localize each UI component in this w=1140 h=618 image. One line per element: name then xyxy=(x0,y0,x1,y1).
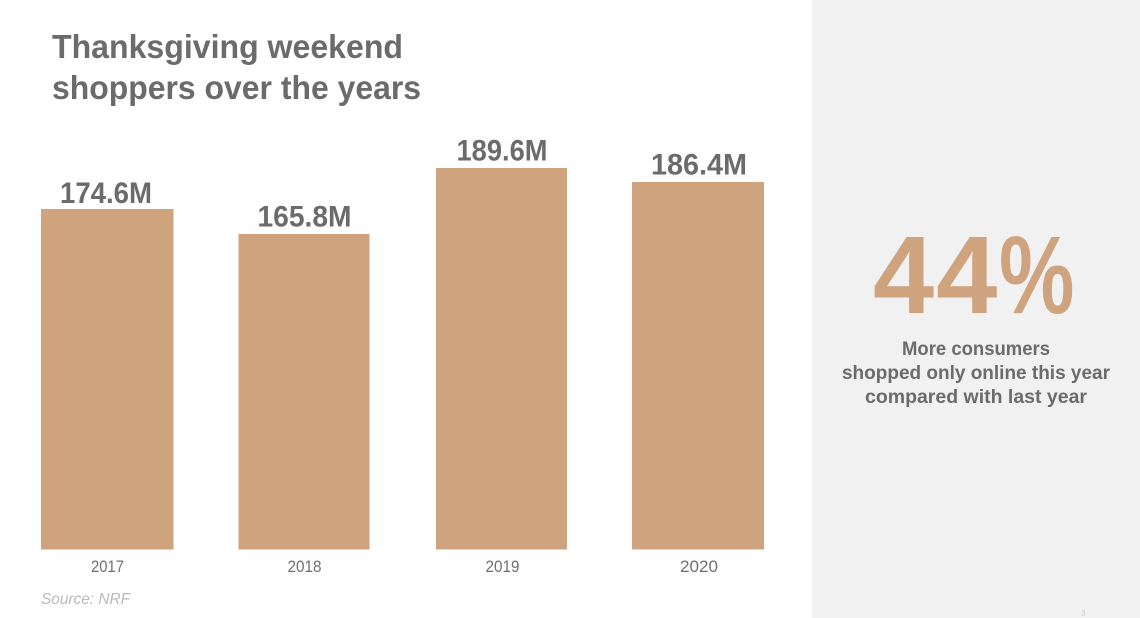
bar: 2020: 186.4M xyxy=(651,148,747,182)
bar: 2019 xyxy=(436,134,567,576)
stat description xyxy=(842,339,1111,408)
title: Thanksgiving weekend xyxy=(52,28,403,65)
stat description: compared with last year xyxy=(865,387,1088,408)
bar chart xyxy=(41,134,764,576)
stat description: More consumers xyxy=(902,339,1050,360)
title xyxy=(52,28,421,106)
bar: 2018 xyxy=(238,200,370,576)
bar: 2017 xyxy=(41,177,174,576)
bar: 2017: 174.6M xyxy=(60,177,152,210)
bar: 2019: 189.6M xyxy=(456,134,548,168)
bar: 2017: 2017 xyxy=(91,557,124,576)
bar: 2018: 2018 xyxy=(288,557,322,576)
big stat: 44%: 44 xyxy=(873,214,999,337)
bar: 2020: 2020 xyxy=(680,557,718,576)
panel: right stat background xyxy=(812,0,1140,618)
title: shoppers over the years xyxy=(52,69,421,106)
stat description: shopped only online this year xyxy=(842,363,1111,384)
page number: 3 xyxy=(1081,609,1086,618)
bar: 2019: 2019 xyxy=(486,557,520,576)
bar: 2018: 165.8M xyxy=(258,200,352,234)
source note: Source: NRF xyxy=(41,591,131,608)
bar: 2020 xyxy=(632,148,764,576)
big stat: 44%: % xyxy=(999,214,1076,337)
